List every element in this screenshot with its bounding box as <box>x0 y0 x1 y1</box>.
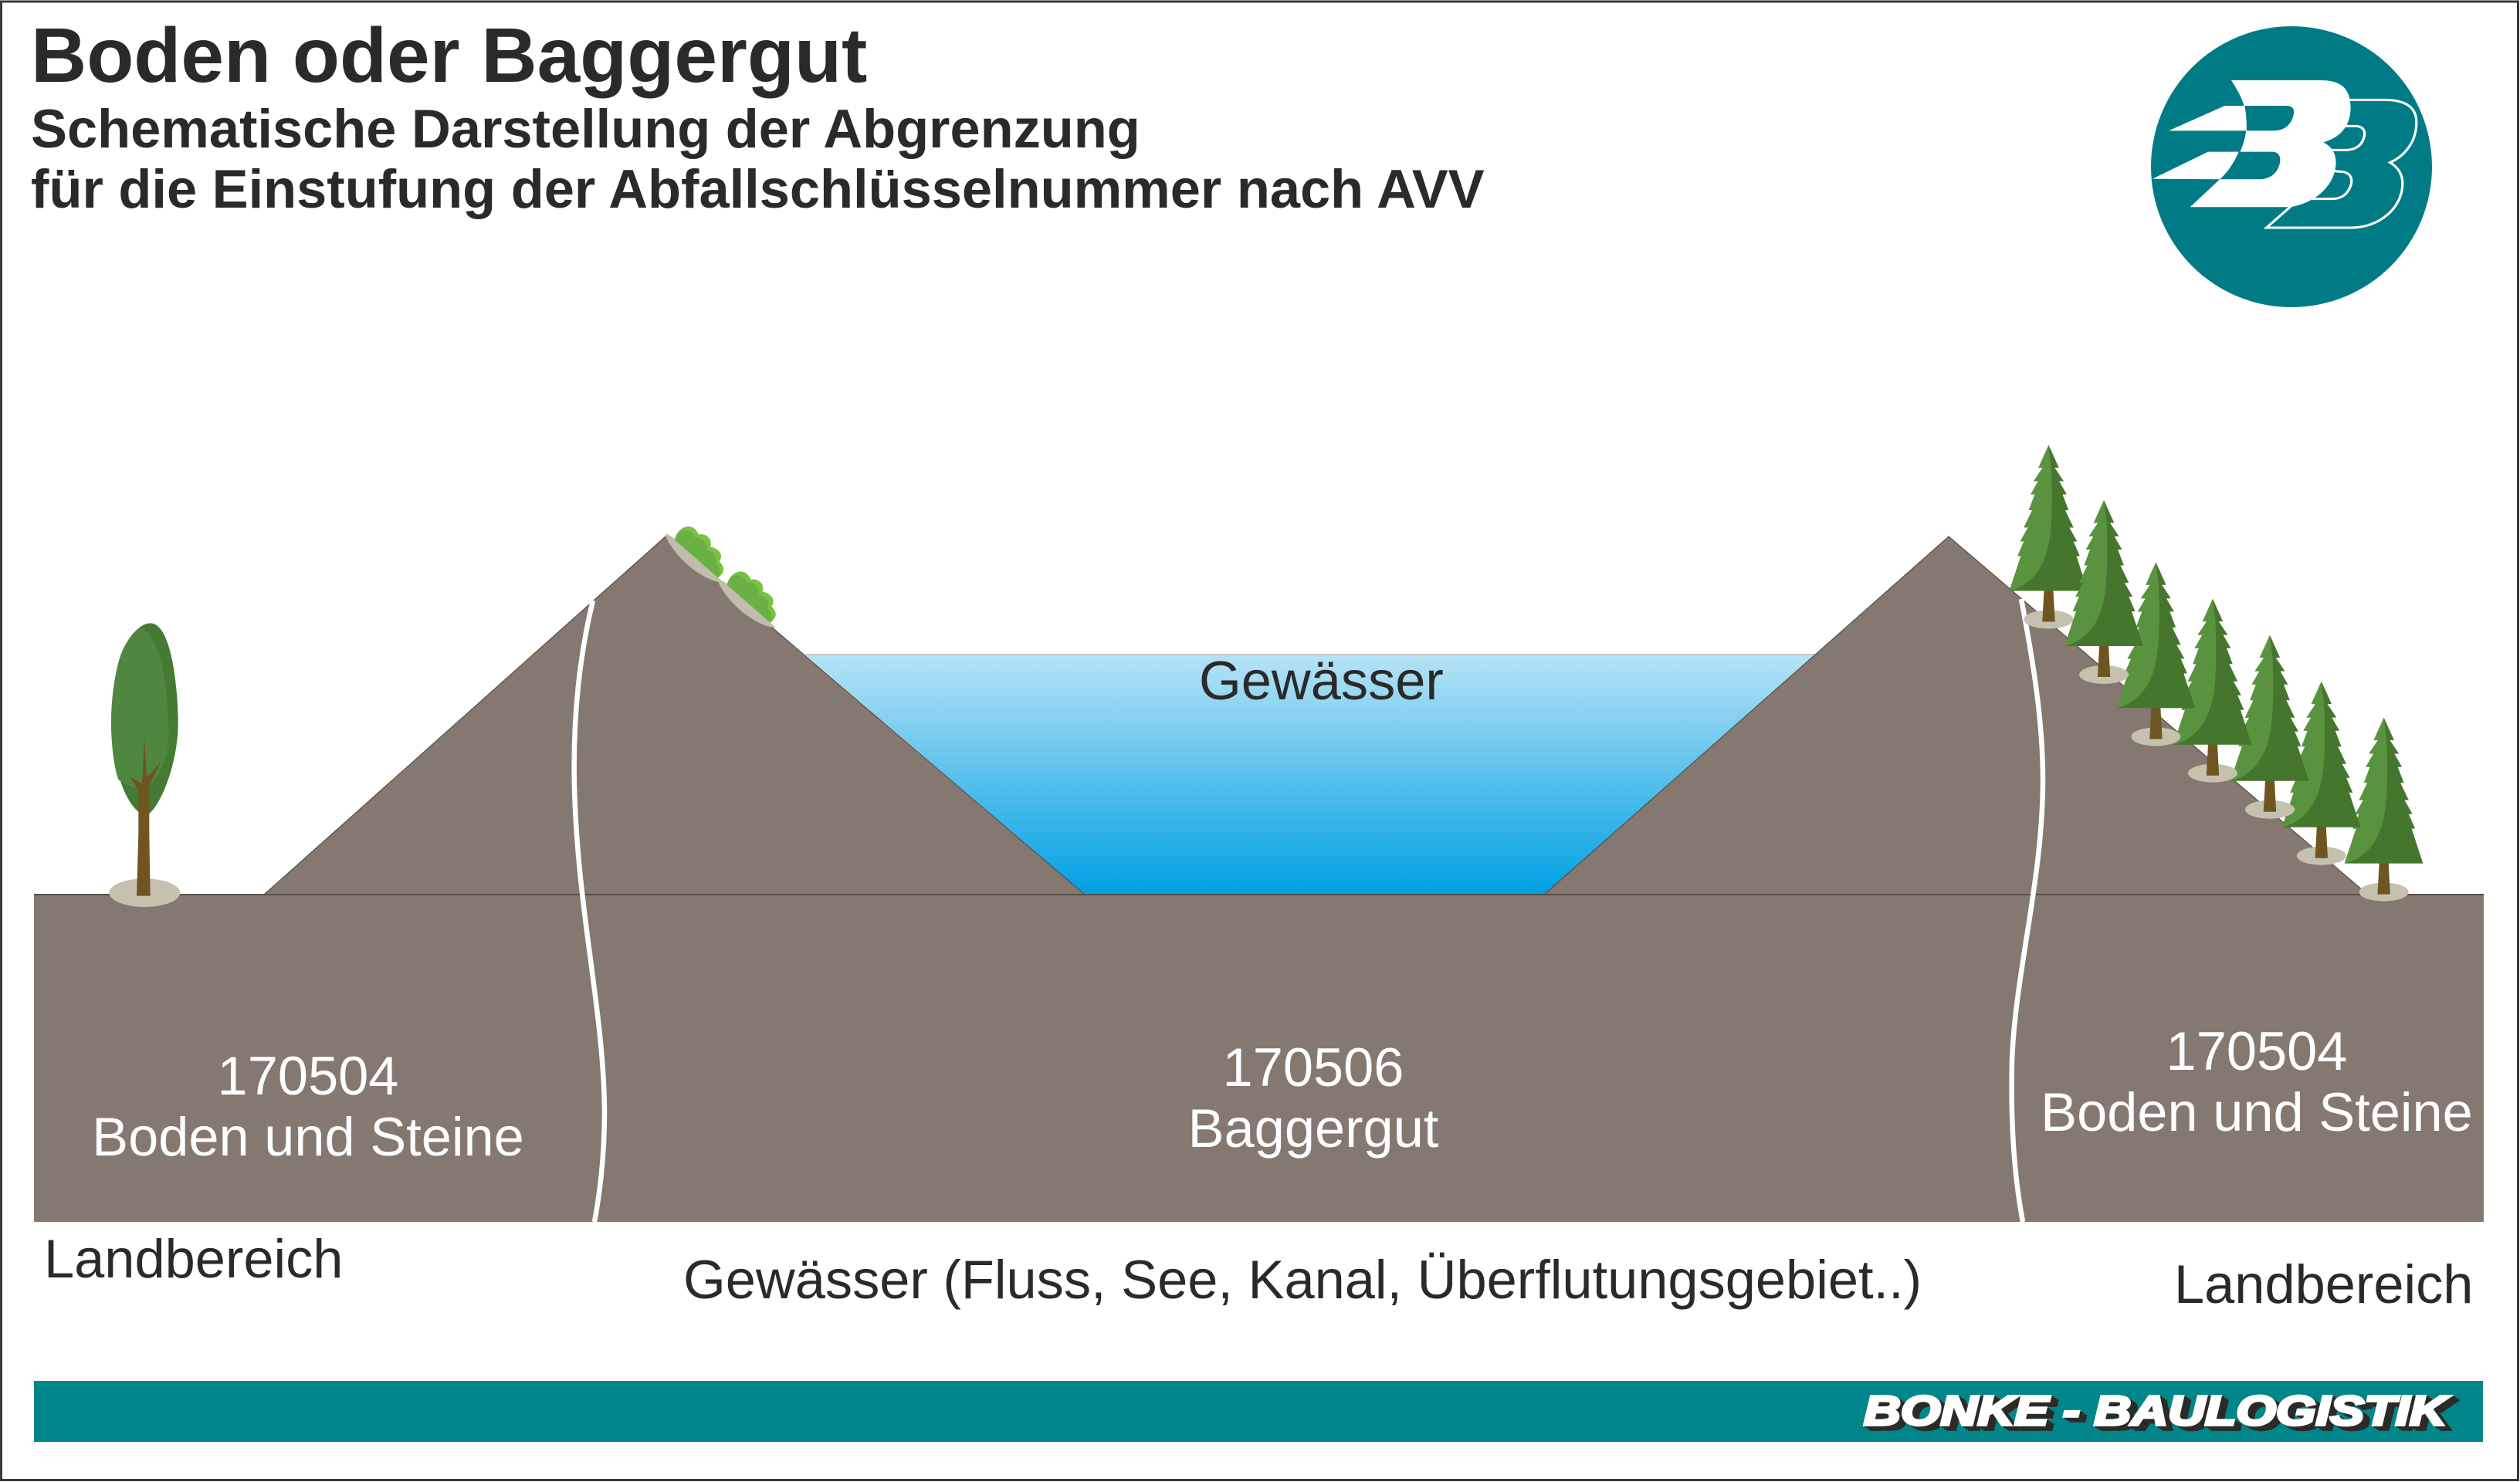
conifers on right embankment <box>2009 445 2423 902</box>
label: dredged material: Baggergut <box>1188 1098 1439 1159</box>
subtitle: Schematische Darstellung der Abgrenzung <box>31 98 1140 159</box>
label: Landbereich right: Landbereich <box>2174 1254 2473 1315</box>
label: dredged material: 170506 <box>1223 1037 1404 1098</box>
logo: Bonke BB <box>2151 26 2432 307</box>
ground line <box>34 894 2484 895</box>
footer brand text: BONKE - BAULOGISTIK <box>1864 1388 2451 1434</box>
subtitle <box>31 98 1485 219</box>
title: Boden oder Baggergut <box>31 12 867 99</box>
shrubs on left embankment <box>666 526 776 628</box>
label: left soil: 170504 <box>218 1045 398 1106</box>
right embankment <box>1544 536 2368 895</box>
left embankment <box>264 536 1085 895</box>
label: left soil <box>92 1045 524 1167</box>
boundary line right <box>2012 599 2043 1222</box>
label: right soil: Boden und Steine <box>2041 1081 2473 1142</box>
label: right soil: 170504 <box>2166 1020 2347 1081</box>
water body <box>805 655 1816 895</box>
label: Landbereich left: Landbereich <box>44 1228 343 1289</box>
tree: deciduous left <box>109 623 180 907</box>
footer bar <box>34 1381 2483 1442</box>
label: left soil: Boden und Steine <box>92 1106 524 1167</box>
ground <box>34 895 2484 1222</box>
subtitle: für die Einstufung der Abfallschlüsselnummer nach AVV <box>31 158 1485 219</box>
boundary line left <box>574 601 605 1222</box>
label: dredged material <box>1188 1037 1439 1159</box>
label: Gewässer zone: Gewässer (Fluss, See, Kanal, Überflutungsgebiet..) <box>683 1249 1922 1310</box>
label: right soil <box>2041 1020 2473 1142</box>
label: Gewässer: Gewässer <box>1199 650 1444 711</box>
